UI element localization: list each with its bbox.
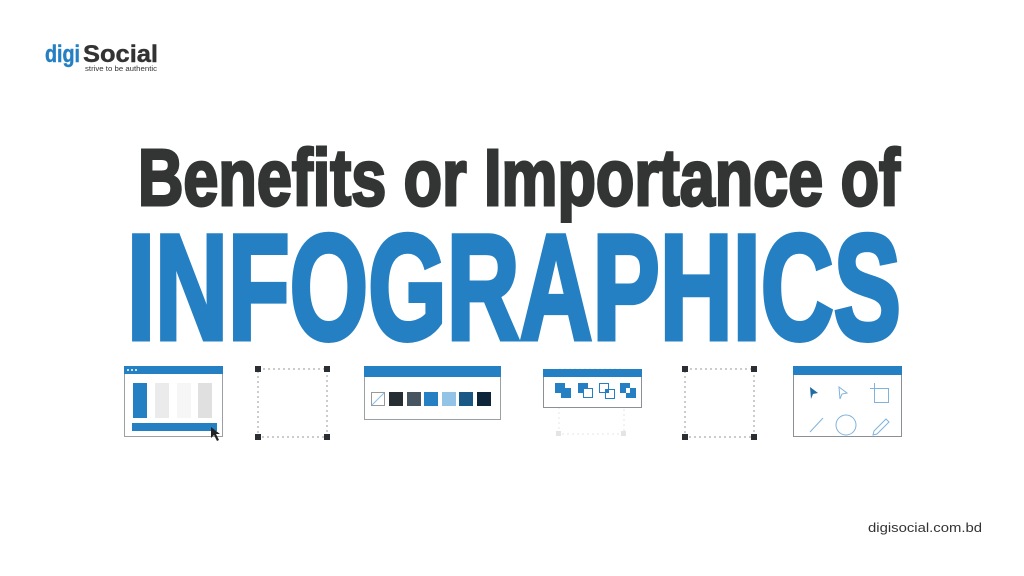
icon: tools window [793, 366, 902, 436]
footer url: digisocial.com.bd [868, 520, 982, 535]
logo: strive to be authentic [85, 66, 158, 73]
icon: layout window [124, 366, 223, 441]
icon: dashed selection box 2 [682, 366, 757, 440]
icon: colour palette window [364, 366, 501, 420]
logo: Social [83, 41, 158, 68]
icon: shape operations window [543, 369, 642, 436]
icon: dashed selection box [255, 366, 330, 440]
logo [45, 41, 158, 73]
logo: digi [45, 41, 80, 68]
